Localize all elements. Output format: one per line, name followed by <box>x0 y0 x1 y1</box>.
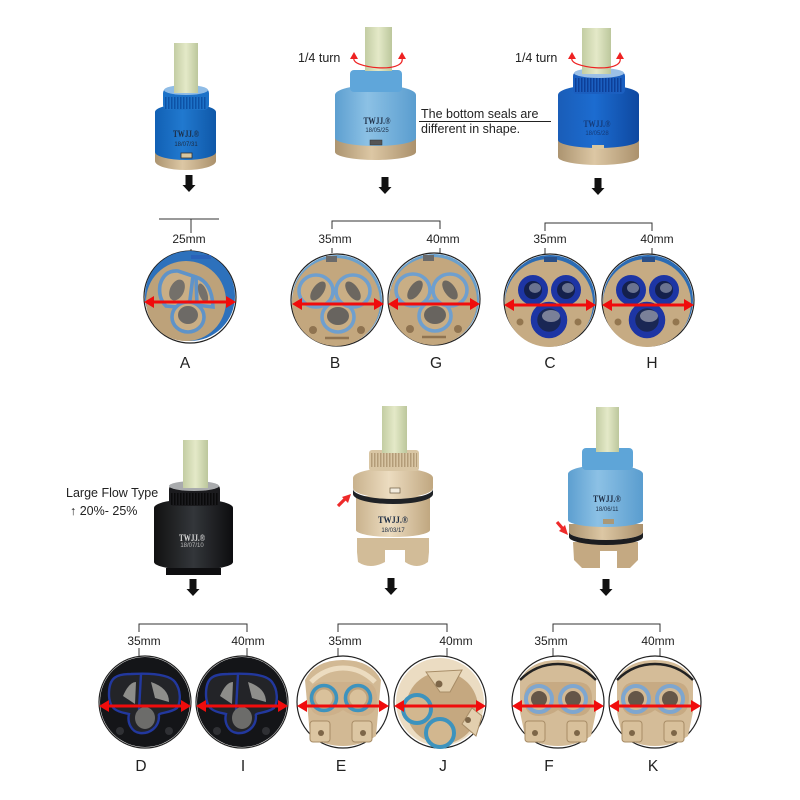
bottom face J <box>394 656 486 748</box>
dimension bracket <box>318 221 460 253</box>
seal note: The bottom seals are <box>421 107 538 121</box>
dimension bracket 25mm: 25mm <box>172 232 206 246</box>
bottom face A <box>144 251 236 343</box>
label K: K <box>648 758 659 775</box>
panel: cartridge type A <box>144 43 236 372</box>
arrow down <box>378 177 392 194</box>
dimension bracket: 40mm <box>641 634 675 648</box>
arrow down <box>186 579 200 596</box>
large flow note: ↑ 20%- 25% <box>70 504 137 518</box>
cartridge B: 18/05/25 <box>365 128 389 134</box>
arrow down <box>600 579 612 596</box>
red width arrow F <box>512 700 604 712</box>
label H: H <box>646 355 658 372</box>
quarter turn annotation <box>515 51 624 68</box>
dimension bracket <box>534 624 675 656</box>
label F: F <box>544 758 554 775</box>
bottom face E <box>297 656 389 748</box>
red width arrow B <box>292 298 384 310</box>
bottom face H <box>602 254 694 347</box>
quarter turn annotation: 1/4 turn <box>298 51 340 65</box>
dimension bracket: 35mm <box>534 634 568 648</box>
red pointer to o-ring <box>557 522 568 535</box>
seal note <box>419 107 551 136</box>
cartridge B: TWJJ.® <box>364 116 391 126</box>
arrow down <box>592 178 604 195</box>
label D: D <box>135 758 147 775</box>
bottom face G <box>388 253 480 345</box>
seal note: different in shape. <box>421 122 520 136</box>
label J: J <box>439 758 447 775</box>
cartridge E <box>353 406 433 566</box>
dimension bracket 25mm <box>159 219 219 252</box>
cartridge A: TWJJ.® <box>173 129 199 139</box>
bottom face C <box>504 254 596 347</box>
panel: cartridge types B and G <box>291 27 551 372</box>
cartridge A: 18/07/31 <box>174 142 198 148</box>
label C: C <box>544 355 556 372</box>
cartridge A <box>155 43 216 170</box>
dimension bracket <box>328 624 473 656</box>
dimension bracket: 40mm <box>439 634 473 648</box>
red width arrow A <box>144 296 236 308</box>
red width arrow E <box>297 700 389 712</box>
cartridge F: TWJJ.® <box>593 494 621 504</box>
dimension bracket: 35mm <box>328 634 362 648</box>
cartridge F: 18/06/11 <box>596 507 619 513</box>
red width arrow K <box>609 700 701 712</box>
label A: A <box>180 355 191 372</box>
bottom face D <box>99 656 191 748</box>
red width arrow J <box>394 700 486 712</box>
bottom face B <box>291 254 383 346</box>
dimension bracket: 40mm <box>231 634 265 648</box>
dimension bracket <box>533 223 674 254</box>
red width arrow I <box>196 700 288 712</box>
cartridge B <box>335 27 416 160</box>
cartridge E: 18/03/17 <box>381 528 405 534</box>
quarter turn annotation <box>298 51 406 68</box>
cartridge D: 18/07/10 <box>180 543 204 549</box>
cartridge F <box>568 407 643 568</box>
dimension bracket: 35mm <box>127 634 161 648</box>
bottom face F <box>512 656 604 748</box>
quarter turn annotation: 1/4 turn <box>515 51 557 65</box>
cartridge D <box>154 440 233 575</box>
cartridge E: TWJJ.® <box>378 515 408 525</box>
red width arrow G <box>388 298 480 310</box>
label I: I <box>241 758 245 775</box>
dimension bracket: 35mm <box>533 232 567 246</box>
dimension bracket: 40mm <box>640 232 674 246</box>
arrow down <box>384 578 398 595</box>
panel: cartridge types F and K <box>512 407 701 775</box>
label G: G <box>430 355 442 372</box>
label E: E <box>336 758 346 775</box>
bottom face I <box>196 656 288 748</box>
cartridge C: 18/05/28 <box>585 131 609 137</box>
arrow down <box>182 175 196 192</box>
label B: B <box>330 355 340 372</box>
bottom face K <box>609 656 701 748</box>
large flow note <box>66 486 158 518</box>
red width arrow D <box>99 700 191 712</box>
panel: cartridge types E and J <box>297 406 486 775</box>
panel: cartridge types C and H <box>504 28 694 372</box>
large flow note: Large Flow Type <box>66 486 158 500</box>
cartridge D: TWJJ.® <box>179 533 205 543</box>
red width arrow H <box>602 299 694 311</box>
red pointer to o-ring <box>338 494 351 506</box>
dimension bracket <box>127 624 265 656</box>
cartridge C <box>558 28 639 165</box>
panel: cartridge types D and I <box>66 440 288 775</box>
dimension bracket: 35mm <box>318 232 352 246</box>
dimension bracket: 40mm <box>426 232 460 246</box>
red width arrow C <box>504 299 596 311</box>
cartridge C: TWJJ.® <box>584 119 611 129</box>
